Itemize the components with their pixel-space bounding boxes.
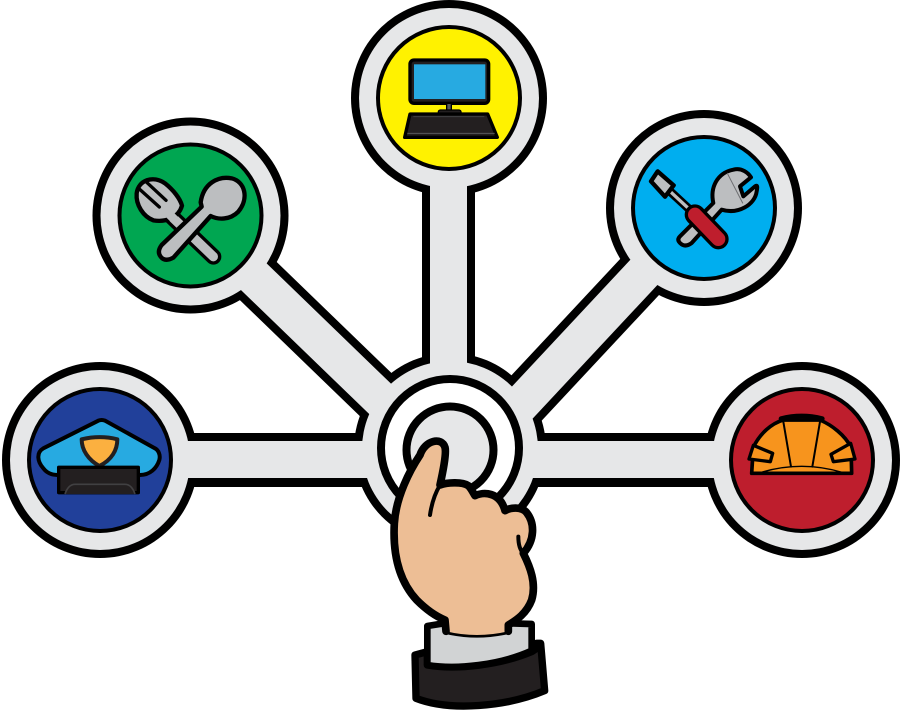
fork [137,179,213,257]
thumb crease [518,537,523,553]
icon: hard hat [749,416,855,473]
node: repair trades [633,137,775,279]
shirt cuff [427,623,532,667]
icon: crossed wrench and screwdriver [651,169,757,245]
node: computing [378,27,520,169]
wrench [678,169,757,245]
node: food service [120,144,262,286]
finger crease [430,485,440,515]
node: construction [731,389,873,531]
screwdriver [651,171,718,239]
node: police [29,389,171,531]
icon: crossed fork and spoon [137,178,245,260]
icon: police cap [38,420,160,494]
icon: desktop computer [405,60,497,137]
spoon [159,178,245,260]
jacket sleeve [415,643,545,706]
hub button rings [381,379,519,517]
hub and spokes outline [2,0,900,558]
hand pressing button [394,441,545,706]
hand [394,441,533,636]
hub and spokes fill [10,8,892,550]
